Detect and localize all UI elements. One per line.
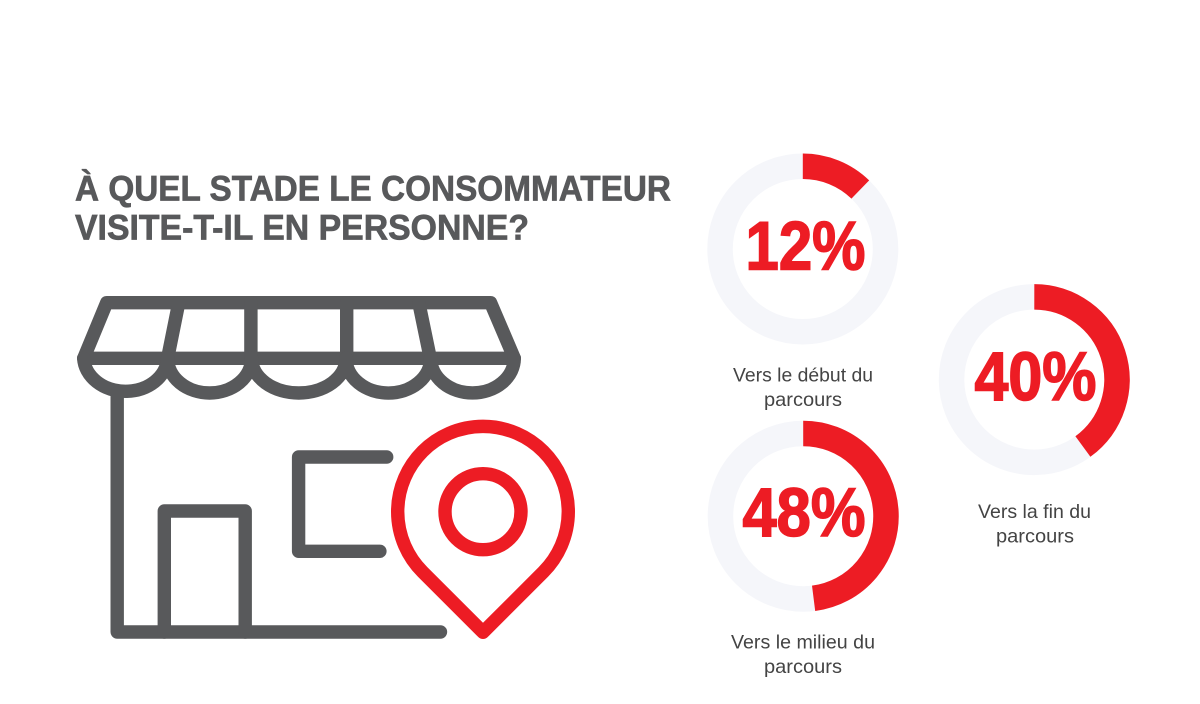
label: middle of journey <box>731 632 875 678</box>
label: end of journey: Vers la fin du <box>978 501 1091 523</box>
donut: 48% middle of journey <box>720 433 886 599</box>
icon: store awning <box>84 303 514 393</box>
label: early in journey: parcours <box>764 389 842 411</box>
donut: 48% middle of journey: 48% <box>742 474 866 551</box>
icon: store window <box>299 457 387 551</box>
label: middle of journey: Vers le milieu du <box>731 632 875 654</box>
label: end of journey: parcours <box>996 526 1074 548</box>
icon: store door <box>164 511 245 632</box>
label: end of journey <box>978 501 1091 548</box>
title: À QUEL STADE LE CONSOMMATEUR <box>75 168 671 208</box>
icon: store wall and floor <box>117 393 440 632</box>
title <box>75 168 671 248</box>
label: early in journey: Vers le début du <box>733 364 873 386</box>
label: middle of journey: parcours <box>764 656 842 678</box>
donut: 40% end of journey <box>952 297 1117 462</box>
icon: storefront with location pin <box>84 303 568 632</box>
icon: location pin <box>398 426 568 632</box>
donut: 40% end of journey: 40% <box>974 338 1096 415</box>
donut: 12% early in journey <box>720 166 886 332</box>
donut: 12% early in journey: 12% <box>746 208 866 284</box>
title: VISITE-T-IL EN PERSONNE? <box>75 208 529 248</box>
label: early in journey <box>733 364 873 411</box>
